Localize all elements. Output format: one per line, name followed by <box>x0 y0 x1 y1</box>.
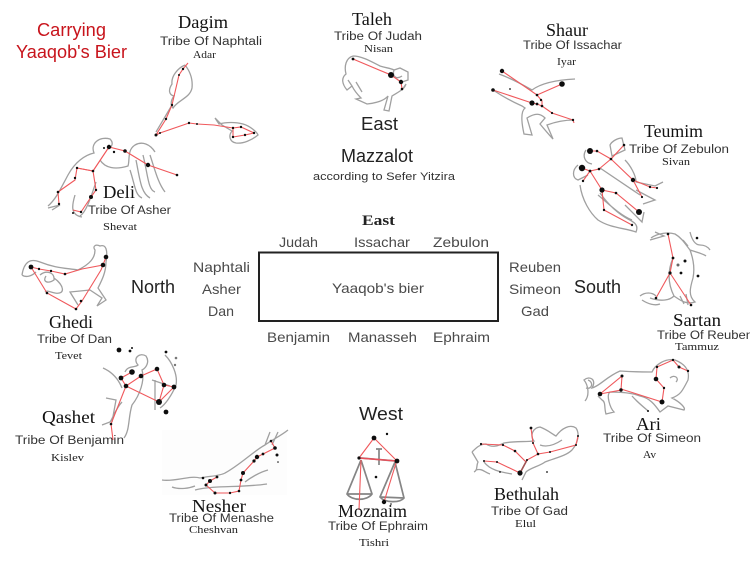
heading: Bethulah: Bethulah <box>494 484 559 504</box>
month: Cheshvan: Cheshvan <box>189 525 239 536</box>
tribe: Benjamin: Tribe Of Benjamin <box>15 435 124 447</box>
panel: Teumim <box>574 121 729 232</box>
title: Carrying Yaaqob's Bier: Carrying <box>37 20 106 40</box>
month: Tishri: Tishri <box>359 538 389 549</box>
tribe: Gad: Tribe Of Gad <box>491 506 568 518</box>
heading: Ari: Ari <box>636 414 661 434</box>
month: Iyar: Iyar <box>557 57 577 68</box>
month: Av: Av <box>643 450 657 461</box>
heading: Dagim: Dagim <box>178 12 228 32</box>
bier rectangle <box>259 252 498 321</box>
heading: East: East <box>362 213 395 229</box>
tribe: Naphtali: Tribe Of Naphtali <box>160 36 262 48</box>
icon: twins constellation <box>574 138 663 232</box>
tribes: top row: Zebulon <box>433 234 489 250</box>
icon: crab constellation <box>640 232 710 306</box>
tribe: Menashe: Tribe Of Menashe <box>169 513 274 525</box>
tribes: right column: Reuben <box>509 259 561 275</box>
label: North direction: North <box>131 277 175 297</box>
panel: Nesher <box>162 430 288 536</box>
icon: archer constellation <box>102 347 177 440</box>
month: Tammuz: Tammuz <box>675 342 719 353</box>
tribes: right column <box>509 259 561 319</box>
tribes: bottom row: Benjamin <box>267 329 330 345</box>
tribe: Asher: Tribe Of Asher <box>88 205 171 217</box>
heading: Teumim: Teumim <box>644 121 703 141</box>
tribes: top row: Judah <box>279 234 318 250</box>
tribe: Simeon: Tribe Of Simeon <box>603 433 701 445</box>
label: South direction: South <box>574 277 621 297</box>
tribes: left column <box>193 259 250 319</box>
panel: Deli <box>48 138 178 233</box>
tribes: left column: Dan <box>208 303 234 319</box>
label: East direction: East <box>361 114 398 134</box>
panel: Dagim <box>154 12 262 143</box>
heading: Sartan: Sartan <box>673 310 721 330</box>
heading: Nesher: Nesher <box>192 496 246 516</box>
panel: Ghedi <box>22 245 112 362</box>
panel: central bier diagram <box>193 213 561 345</box>
panel: Ari <box>584 359 701 461</box>
title: Carrying Yaaqob's Bier: Yaaqob's Bier <box>16 42 127 62</box>
icon: bull constellation <box>491 69 575 139</box>
icon: ram constellation <box>343 56 408 111</box>
tribe: Ephraim: Tribe Of Ephraim <box>328 521 428 533</box>
panel: Moznaim <box>328 433 428 549</box>
icon: two fish constellation <box>154 63 258 143</box>
heading: Deli: Deli <box>103 182 135 202</box>
subheading: according to Sefer Yitzira: according to Sefer Yitzira <box>313 171 456 183</box>
month: Kislev: Kislev <box>51 453 85 464</box>
icon: lion constellation <box>584 359 689 414</box>
tribes: bottom row <box>267 329 490 345</box>
panel: Sartan <box>640 232 750 353</box>
tribes: left column: Naphtali <box>193 259 250 275</box>
icon: scales constellation <box>347 433 404 510</box>
tribes: bottom row: Ephraim <box>433 329 490 345</box>
heading: Shaur: Shaur <box>546 20 588 40</box>
icon: goat constellation <box>22 245 108 310</box>
icon: water bearer constellation <box>48 138 178 217</box>
month: Elul: Elul <box>515 519 536 530</box>
tribes: top row: Issachar <box>354 234 410 250</box>
tribes: right column: Simeon <box>509 281 561 297</box>
heading: Mazzalot: Mazzalot <box>341 146 413 166</box>
icon: virgin constellation <box>472 426 579 480</box>
heading: Moznaim: Moznaim <box>338 501 407 521</box>
tribes: right column: Gad <box>521 303 549 319</box>
tribes: left column: Asher <box>202 281 241 297</box>
month: Tevet: Tevet <box>55 351 82 362</box>
month: Shevat: Shevat <box>103 222 137 233</box>
heading: Qashet: Qashet <box>42 407 95 427</box>
label: West direction: West <box>359 404 403 424</box>
tribe: Dan: Tribe Of Dan <box>37 334 112 346</box>
month: Adar: Adar <box>193 50 217 61</box>
month: Sivan: Sivan <box>662 157 691 168</box>
tribes: top row <box>279 234 489 250</box>
tribe: Judah: Tribe Of Judah <box>334 31 422 43</box>
tribe: Zebulon: Tribe Of Zebulon <box>629 144 729 156</box>
tribes: bottom row: Manasseh <box>348 329 417 345</box>
panel: Qashet <box>15 347 177 464</box>
tribe: Issachar: Tribe Of Issachar <box>523 40 622 52</box>
heading: Taleh: Taleh <box>352 9 392 29</box>
panel: Bethulah <box>472 426 579 530</box>
panel: Taleh <box>334 9 422 111</box>
tribe: Reuben: Tribe Of Reuben <box>657 330 750 342</box>
bier label: Yaaqob's bier <box>332 280 424 296</box>
icon: eagle constellation <box>162 430 288 495</box>
panel: Shaur <box>491 20 622 139</box>
title: Carrying Yaaqob's Bier <box>16 20 127 62</box>
heading: Ghedi: Ghedi <box>49 312 93 332</box>
month: Nisan: Nisan <box>364 44 394 55</box>
